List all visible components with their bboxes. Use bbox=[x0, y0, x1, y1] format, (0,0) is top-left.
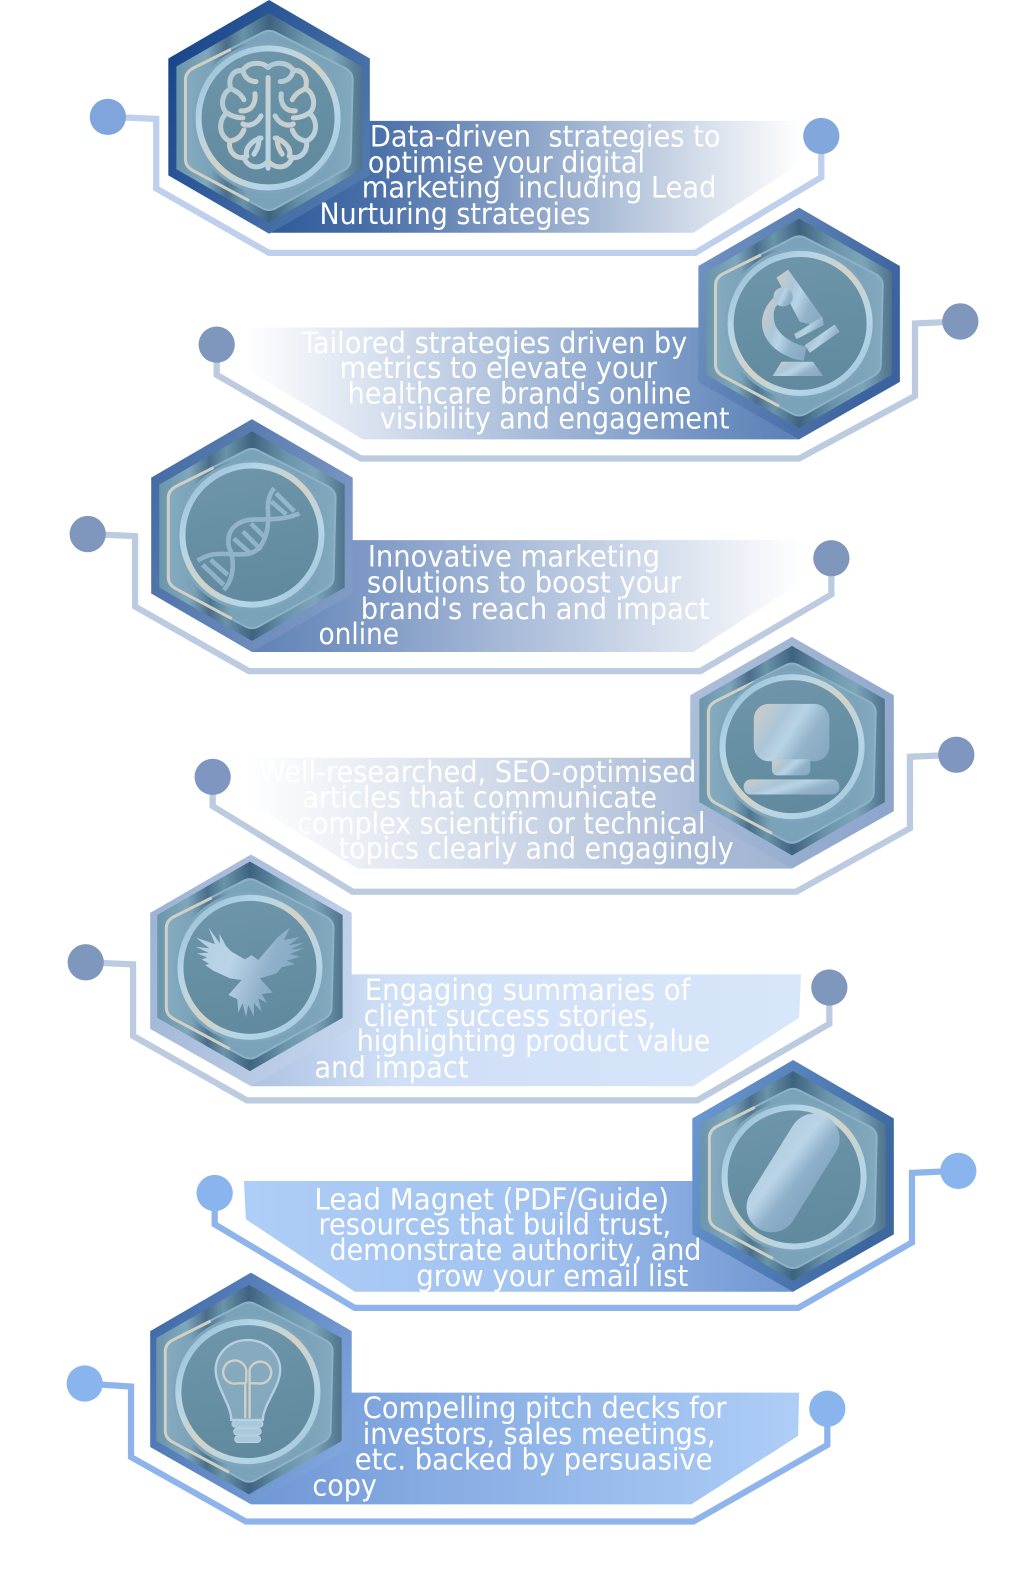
banner bbox=[269, 121, 801, 233]
hexagon badge: monitor bbox=[690, 637, 894, 869]
icon: monitor bbox=[744, 704, 839, 795]
text block: copy bbox=[312, 1469, 377, 1504]
connector dot left bbox=[70, 516, 106, 552]
text block: visibility and engagement bbox=[380, 401, 730, 436]
banner bbox=[252, 540, 801, 652]
connector line bbox=[88, 534, 831, 671]
banner bbox=[252, 974, 801, 1086]
connector dot left bbox=[67, 1365, 103, 1402]
text block: Well-researched, SEO-optimised bbox=[259, 755, 696, 790]
connector dot left bbox=[199, 326, 235, 363]
icon: microscope bbox=[762, 270, 840, 376]
hexagon badge: DNA bbox=[151, 419, 353, 652]
text block: topics clearly and engagingly bbox=[339, 832, 734, 867]
text block: client success stories, bbox=[364, 999, 656, 1034]
text block: Compelling pitch decks for bbox=[363, 1391, 727, 1426]
text block: resources that build trust, bbox=[318, 1208, 671, 1243]
text block: Innovative marketing bbox=[368, 540, 660, 575]
connector line bbox=[86, 962, 829, 1100]
text block bbox=[314, 1182, 701, 1294]
connector line bbox=[213, 755, 956, 892]
hexagon badge: microscope bbox=[698, 208, 900, 439]
icon: light bulb bbox=[216, 1340, 280, 1442]
text block bbox=[314, 973, 710, 1085]
panel: tailored healthcare strategies bbox=[199, 208, 978, 458]
hexagon badge: eagle bbox=[150, 854, 352, 1086]
panel: SEO-optimised articles bbox=[195, 637, 974, 892]
connector dot right bbox=[813, 540, 849, 576]
text block: Data-driven strategies to bbox=[370, 119, 721, 154]
text block: investors, sales meetings, bbox=[363, 1417, 715, 1452]
text block: Tailored strategies driven by bbox=[300, 326, 687, 361]
panel: data-driven strategies bbox=[90, 0, 839, 253]
text block: marketing including Lead bbox=[362, 171, 716, 206]
icon: DNA helix bbox=[198, 488, 299, 590]
text block: online bbox=[318, 617, 399, 652]
text block: Engaging summaries of bbox=[365, 973, 691, 1008]
hexagon badge: brain bbox=[168, 0, 370, 234]
connector dot right bbox=[942, 303, 978, 340]
connector line bbox=[217, 321, 960, 458]
hexagon badge: pill bbox=[692, 1060, 894, 1292]
text block: brand's reach and impact bbox=[361, 592, 709, 627]
connector dot left bbox=[68, 944, 104, 980]
text block: solutions to boost your bbox=[367, 566, 681, 601]
hexagon badge: light bulb bbox=[150, 1273, 352, 1504]
banner bbox=[247, 327, 799, 439]
text block bbox=[300, 326, 730, 436]
text block: Lead Magnet (PDF/Guide) bbox=[314, 1182, 669, 1217]
text block: and impact bbox=[314, 1050, 469, 1085]
text block: highlighting product value bbox=[357, 1024, 710, 1059]
banner bbox=[245, 758, 792, 869]
text block: complex scientific or technical bbox=[297, 807, 705, 842]
connector dot right bbox=[809, 1391, 845, 1427]
connector dot right bbox=[938, 737, 974, 773]
connector line bbox=[215, 1171, 958, 1308]
banner bbox=[251, 1393, 799, 1504]
text block bbox=[319, 119, 721, 232]
text block bbox=[318, 540, 709, 652]
text block: grow your email list bbox=[416, 1259, 688, 1294]
connector line bbox=[108, 117, 821, 253]
text block: healthcare brand's online bbox=[348, 376, 691, 411]
connector dot right bbox=[803, 118, 839, 154]
text block: Nurturing strategies bbox=[319, 197, 591, 232]
text block: metrics to elevate your bbox=[340, 351, 657, 386]
connector dot left bbox=[197, 1175, 233, 1211]
panel: pitch decks bbox=[67, 1273, 845, 1522]
icon: brain bbox=[221, 63, 316, 168]
banner bbox=[244, 1181, 793, 1292]
icon: pill bbox=[737, 1104, 849, 1242]
text block: optimise your digital bbox=[368, 146, 645, 181]
connector dot right bbox=[811, 969, 847, 1006]
panel: client success stories bbox=[68, 854, 847, 1100]
text block: etc. backed by persuasive bbox=[355, 1442, 712, 1477]
connector line bbox=[85, 1384, 827, 1522]
panel: innovative marketing bbox=[70, 419, 849, 671]
text block: demonstrate authority, and bbox=[330, 1233, 701, 1268]
connector dot right bbox=[940, 1153, 976, 1189]
connector dot left bbox=[90, 99, 126, 135]
icon: eagle bbox=[196, 927, 304, 1017]
text block bbox=[312, 1391, 727, 1504]
connector dot left bbox=[195, 759, 231, 795]
text block bbox=[259, 755, 734, 867]
text block: articles that communicate bbox=[302, 780, 657, 815]
panel: lead magnet resources bbox=[197, 1060, 976, 1308]
